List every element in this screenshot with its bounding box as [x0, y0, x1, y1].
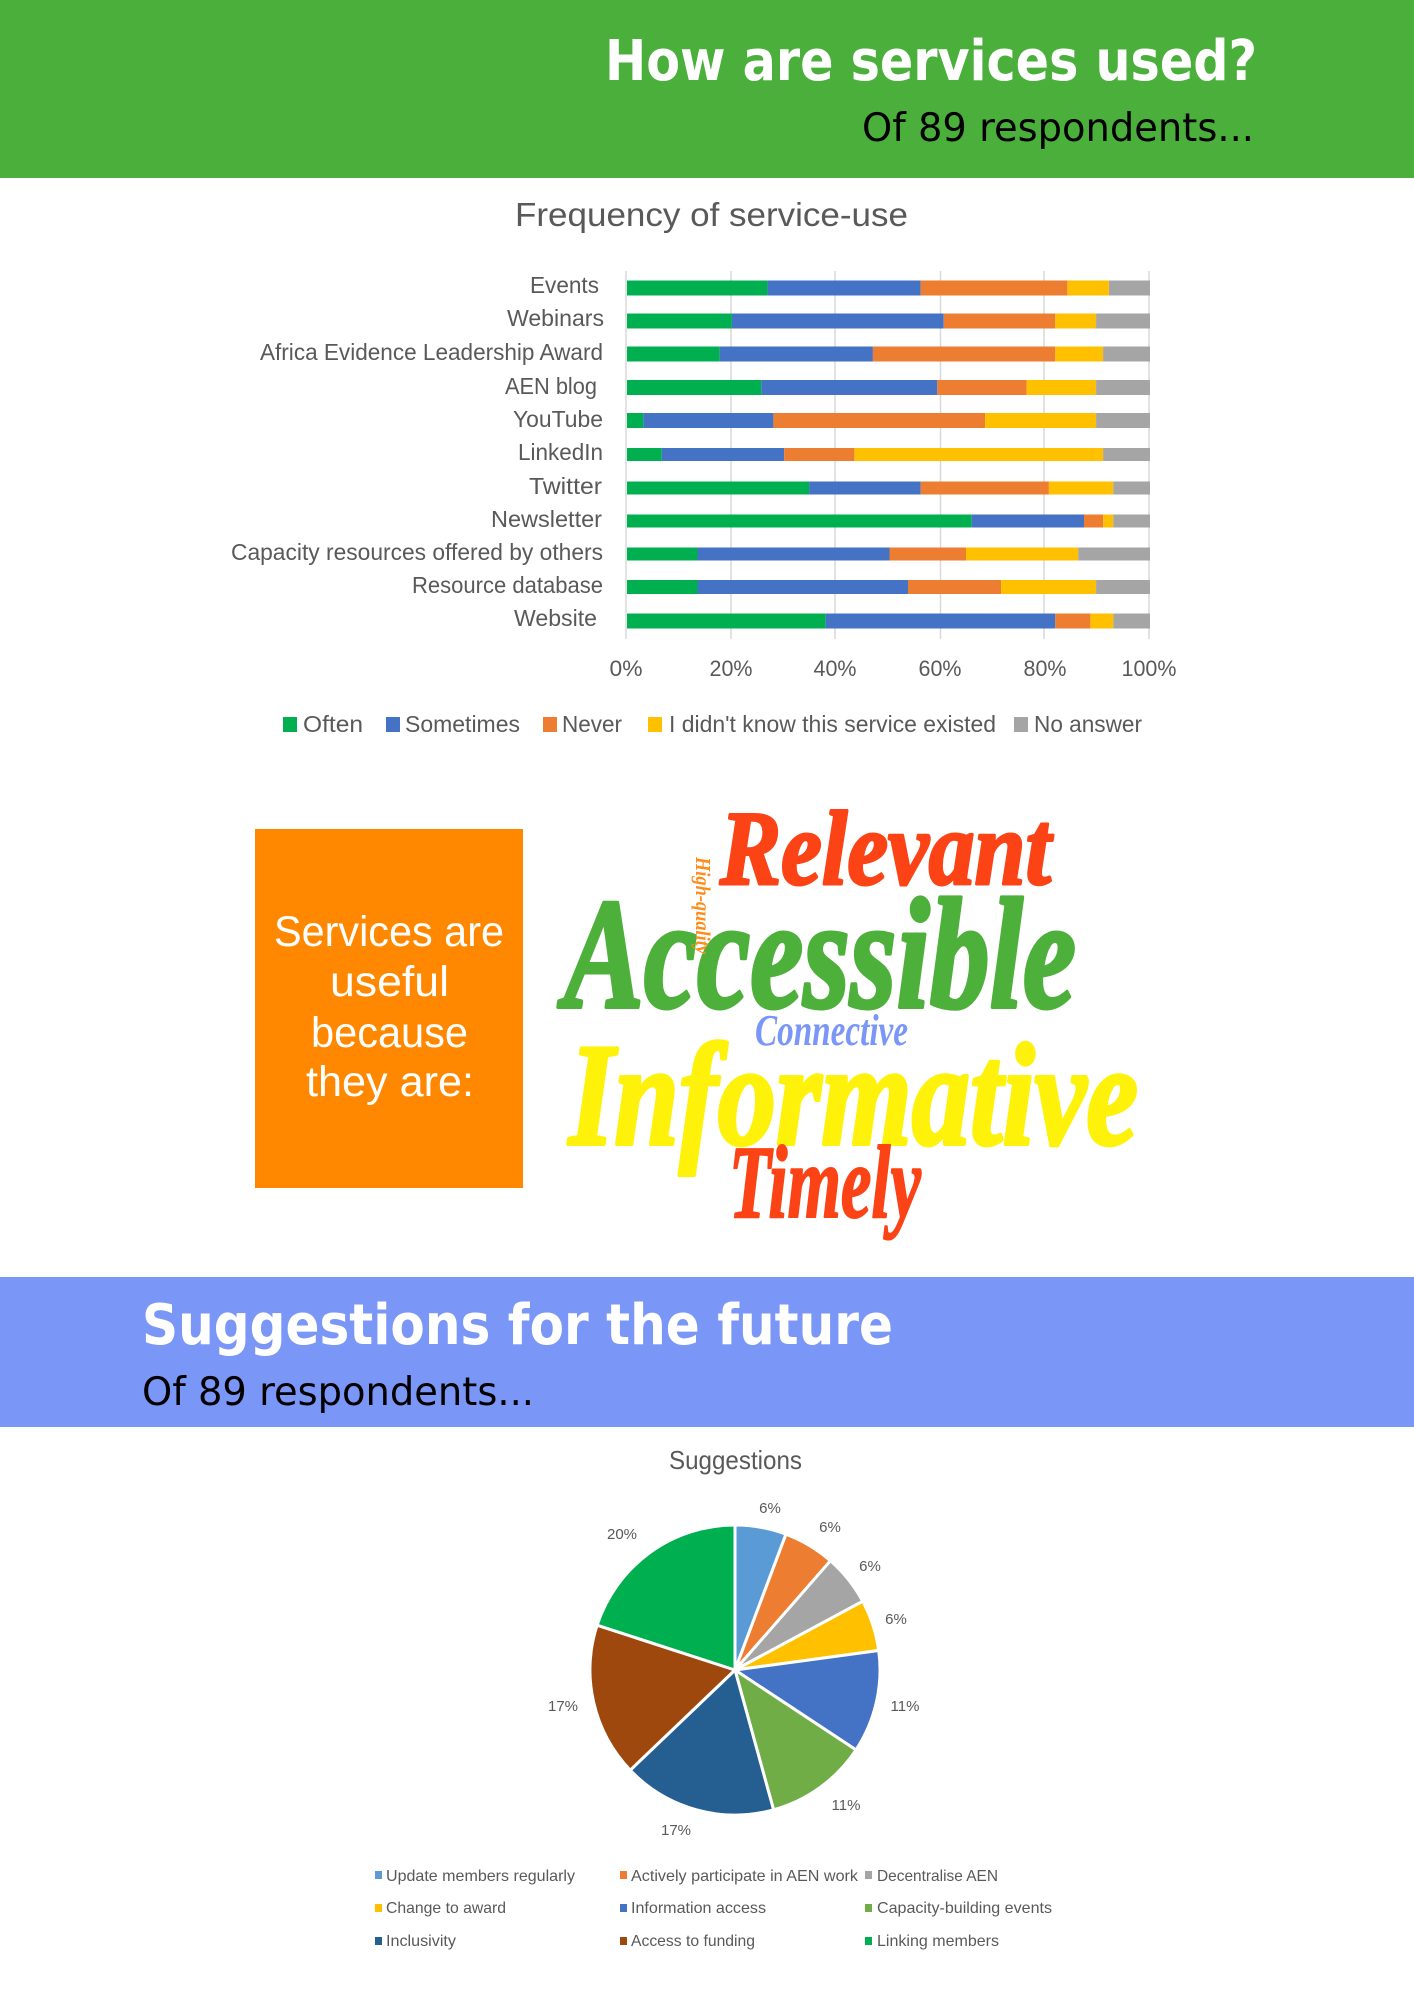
x axis labels [610, 656, 1176, 681]
pie data labels: 6% [885, 1611, 907, 1628]
pie data labels: 6% [819, 1519, 841, 1536]
pie chart: suggestions [375, 1445, 1052, 1950]
chart legend [283, 711, 1142, 737]
row: Africa Evidence Leadership Award [260, 339, 1150, 365]
row: Resource database: Resource database [412, 572, 603, 598]
pie legend: Access to funding [631, 1933, 755, 1950]
pie data labels: 6% [759, 1500, 781, 1517]
pie legend: Actively participate in AEN work [631, 1868, 859, 1885]
row: Twitter: Twitter [529, 473, 602, 499]
pie legend [375, 1868, 1052, 1950]
callout: services are useful because they are: Services are [274, 908, 504, 956]
chart legend: No answer [1034, 711, 1142, 737]
chart legend: Often [303, 711, 363, 737]
pie data labels [548, 1500, 919, 1839]
subheading: of 89 respondents: Of 89 respondents... [862, 106, 1254, 151]
row: AEN blog [505, 373, 1150, 399]
header band: how are services used [0, 0, 1414, 178]
stacked bar chart: frequency of service-use [231, 196, 1176, 737]
row: Webinars: Webinars [507, 305, 604, 331]
pie slices [590, 1525, 880, 1815]
section band: suggestions for the future [0, 1277, 1414, 1427]
x axis labels: 0% [610, 656, 642, 681]
row: Newsletter [491, 506, 1150, 532]
row: Newsletter: Newsletter [491, 506, 602, 532]
chart legend: Never [562, 711, 622, 737]
x axis labels: 80% [1024, 656, 1066, 681]
row: Webinars [507, 305, 1150, 331]
word: Relevant: Relevant [719, 790, 1054, 907]
pie data labels: 6% [859, 1558, 881, 1575]
pie legend: Capacity-building events [877, 1900, 1052, 1917]
heading: how are services used: How are services used? [605, 29, 1257, 94]
row: Resource database [412, 572, 1150, 598]
row: Website [514, 605, 1150, 631]
chart title: Frequency of service-use [515, 196, 908, 233]
chart legend: Sometimes [405, 711, 520, 737]
heading: suggestions for the future: Suggestions for the future [142, 1293, 893, 1358]
pie legend: Decentralise AEN [877, 1868, 998, 1885]
row: Website: Website [514, 605, 597, 631]
pie legend: Inclusivity [386, 1933, 456, 1950]
row: Capacity resources offered by others: Capacity resources offered by others [231, 539, 603, 565]
word: Informative: Informative [567, 1014, 1138, 1176]
chart title: Suggestions [669, 1445, 802, 1475]
x axis labels: 100% [1122, 656, 1176, 681]
callout: services are useful because they are: they are: [306, 1058, 474, 1106]
pie legend: Update members regularly [386, 1868, 575, 1885]
row: LinkedIn: LinkedIn [518, 439, 603, 465]
pie data labels: 20% [607, 1526, 637, 1543]
pie data labels: 17% [661, 1822, 691, 1839]
pie data labels: 11% [832, 1797, 860, 1814]
row: Events [530, 272, 1150, 298]
callout: services are useful because they are [255, 829, 523, 1188]
callout: services are useful because they are: useful [330, 958, 449, 1006]
word: Timely: Timely [729, 1125, 922, 1240]
row: Africa Evidence Leadership Award: Africa Evidence Leadership Award [260, 339, 603, 365]
subheading: of 89 respondents: Of 89 respondents... [142, 1370, 534, 1415]
x axis labels: 40% [814, 656, 856, 681]
chart legend: I didn't know this service existed [669, 711, 996, 737]
word: Accessible: Accessible [557, 867, 1076, 1042]
x axis labels: 60% [918, 656, 962, 681]
word cloud [557, 790, 1138, 1240]
x axis labels: 20% [710, 656, 752, 681]
row: Capacity resources offered by others [231, 539, 1150, 565]
pie legend: Change to award [386, 1900, 506, 1917]
row: YouTube: YouTube [513, 406, 603, 432]
pie legend: Information access [631, 1900, 766, 1917]
pie data labels: 11% [891, 1698, 919, 1715]
row: AEN blog: AEN blog [505, 373, 597, 399]
row: YouTube [513, 406, 1150, 432]
row: LinkedIn [518, 439, 1150, 465]
row: Events: Events [530, 272, 599, 298]
pie data labels: 17% [548, 1698, 578, 1715]
pie legend: Linking members [877, 1933, 999, 1950]
word: High-quality: High-quality [691, 856, 715, 955]
callout: services are useful because they are: because [311, 1009, 468, 1057]
row: Twitter [529, 473, 1150, 499]
word: Connective: Connective [755, 1006, 908, 1055]
